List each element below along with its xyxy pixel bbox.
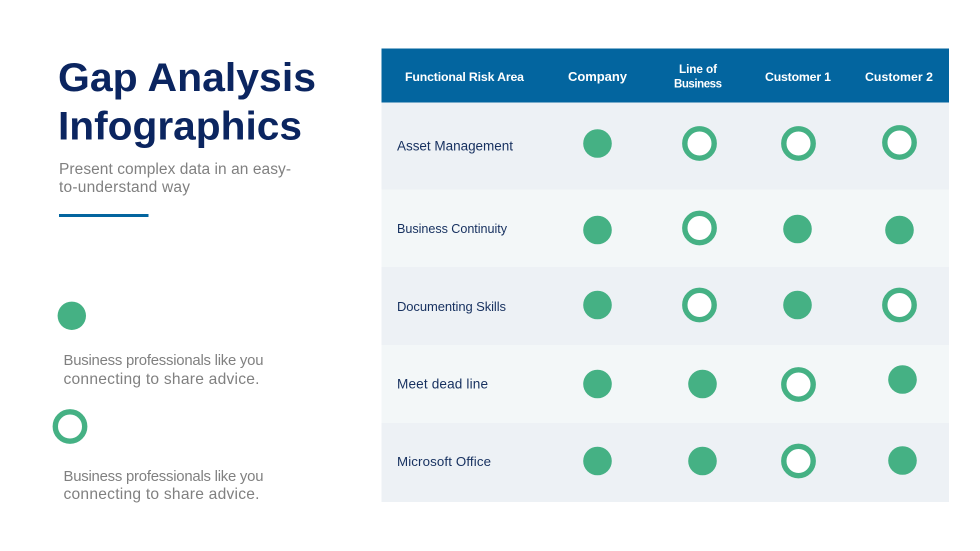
icon: filled circle bbox=[58, 302, 86, 330]
table header: Business bbox=[674, 78, 722, 90]
row: Business Continuity: Business Continuity bbox=[397, 222, 508, 236]
row: Meet dead line: Meet dead line bbox=[397, 376, 488, 392]
subtitle: to-understand way bbox=[59, 179, 190, 196]
row: Microsoft Office: Microsoft Office bbox=[397, 454, 491, 469]
legend text two bbox=[64, 469, 264, 503]
legend text one: Business professionals like you bbox=[64, 353, 264, 369]
table header: Company bbox=[568, 69, 628, 84]
legend: ring bbox=[55, 412, 263, 503]
legend text one: connecting to share advice. bbox=[64, 371, 260, 388]
legend text two: connecting to share advice. bbox=[64, 486, 260, 503]
table header: Customer 2 bbox=[865, 70, 933, 84]
row: Business Continuity bbox=[382, 190, 949, 267]
gap analysis table bbox=[382, 48, 949, 502]
title: Gap Analysis bbox=[58, 56, 316, 100]
row: Documenting Skills: Documenting Skills bbox=[397, 299, 506, 314]
row: Documenting Skills bbox=[382, 267, 949, 345]
subtitle: Present complex data in an easy- bbox=[59, 161, 291, 178]
table header: Functional Risk Area bbox=[405, 70, 524, 84]
subtitle bbox=[59, 161, 291, 196]
legend text one bbox=[64, 353, 264, 388]
row: Microsoft Office bbox=[382, 423, 949, 502]
row: Asset Management bbox=[382, 102, 949, 190]
icon: ring bbox=[55, 412, 85, 441]
title bbox=[58, 56, 316, 148]
row: Meet dead line bbox=[382, 345, 949, 423]
title: Infographics bbox=[58, 104, 302, 148]
table header: Line of bbox=[679, 62, 717, 76]
accent rule bbox=[59, 214, 148, 217]
legend text two: Business professionals like you bbox=[64, 469, 264, 485]
table header bbox=[382, 48, 949, 102]
table header: Customer 1 bbox=[765, 70, 831, 84]
row: Asset Management: Asset Management bbox=[397, 138, 513, 154]
legend: filled circle bbox=[58, 302, 263, 388]
